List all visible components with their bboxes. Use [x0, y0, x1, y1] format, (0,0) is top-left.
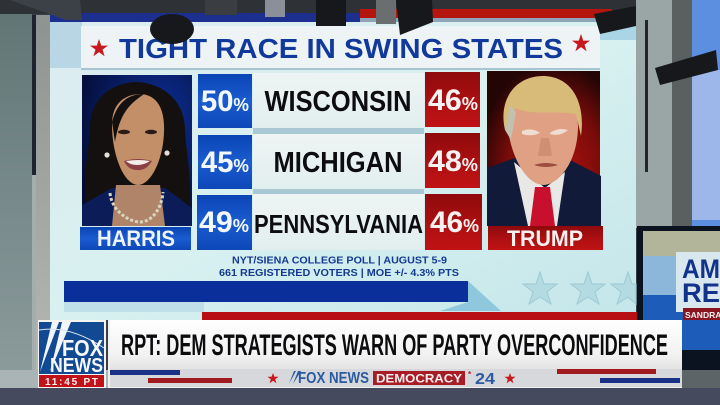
row: Pennsylvania: 49% — [199, 206, 249, 239]
poll source note: NYT/SIENA COLLEGE POLL | AUGUST 5-9 — [232, 254, 447, 266]
blue bar — [64, 281, 501, 312]
logo: Fox News: FOX — [62, 335, 104, 361]
row: Michigan: 48% — [428, 145, 478, 178]
side monitor — [637, 226, 720, 370]
icon: right star — [572, 34, 590, 51]
row: Michigan: 45% — [201, 146, 249, 179]
ticker Democracy 24 — [373, 370, 495, 388]
ticker star right — [504, 373, 516, 383]
row: Wisconsin: 50% — [201, 85, 249, 118]
studio cameras — [10, 0, 718, 85]
poll source note — [219, 254, 459, 279]
label: Trump: TRUMP — [507, 226, 583, 251]
row: Wisconsin: 46% — [428, 84, 478, 117]
icon: left star — [90, 39, 108, 56]
accent bars left — [110, 370, 232, 383]
ticker Fox News mark: FOX NEWS — [298, 370, 369, 387]
ticker Democracy 24: 24 — [475, 371, 495, 388]
row: Michigan: MICHIGAN — [274, 147, 402, 179]
ticker star left — [268, 373, 278, 383]
label: Harris: HARRIS — [97, 226, 175, 251]
title: TIGHT RACE IN SWING STATES — [119, 33, 563, 64]
portrait: Harris — [82, 75, 192, 226]
poll source note: 661 REGISTERED VOTERS | MOE +/- 4.3% PTS — [219, 267, 459, 279]
accent bars right — [557, 369, 680, 383]
time bug: 11:45 PT — [45, 377, 98, 388]
label: Trump — [488, 226, 603, 251]
row: Michigan — [198, 133, 480, 189]
ticker Democracy 24: * — [468, 370, 472, 379]
side monitor: RE — [682, 278, 720, 308]
row: Pennsylvania — [197, 194, 482, 250]
red bar — [202, 312, 637, 320]
row: Pennsylvania: PENNSYLVANIA — [254, 209, 423, 239]
title banner — [81, 26, 600, 70]
ticker Democracy 24: DEMOCRACY — [376, 372, 462, 386]
row: Wisconsin — [198, 72, 480, 128]
row: Wisconsin: WISCONSIN — [264, 86, 412, 118]
logo: Fox News — [38, 320, 106, 388]
logo: Fox News: NEWS — [50, 355, 103, 377]
row: Pennsylvania: 46% — [430, 206, 479, 239]
portrait: Trump — [487, 71, 601, 226]
broadcast screen — [50, 9, 636, 320]
lower third banner — [108, 320, 682, 388]
decorative stars — [523, 272, 636, 304]
